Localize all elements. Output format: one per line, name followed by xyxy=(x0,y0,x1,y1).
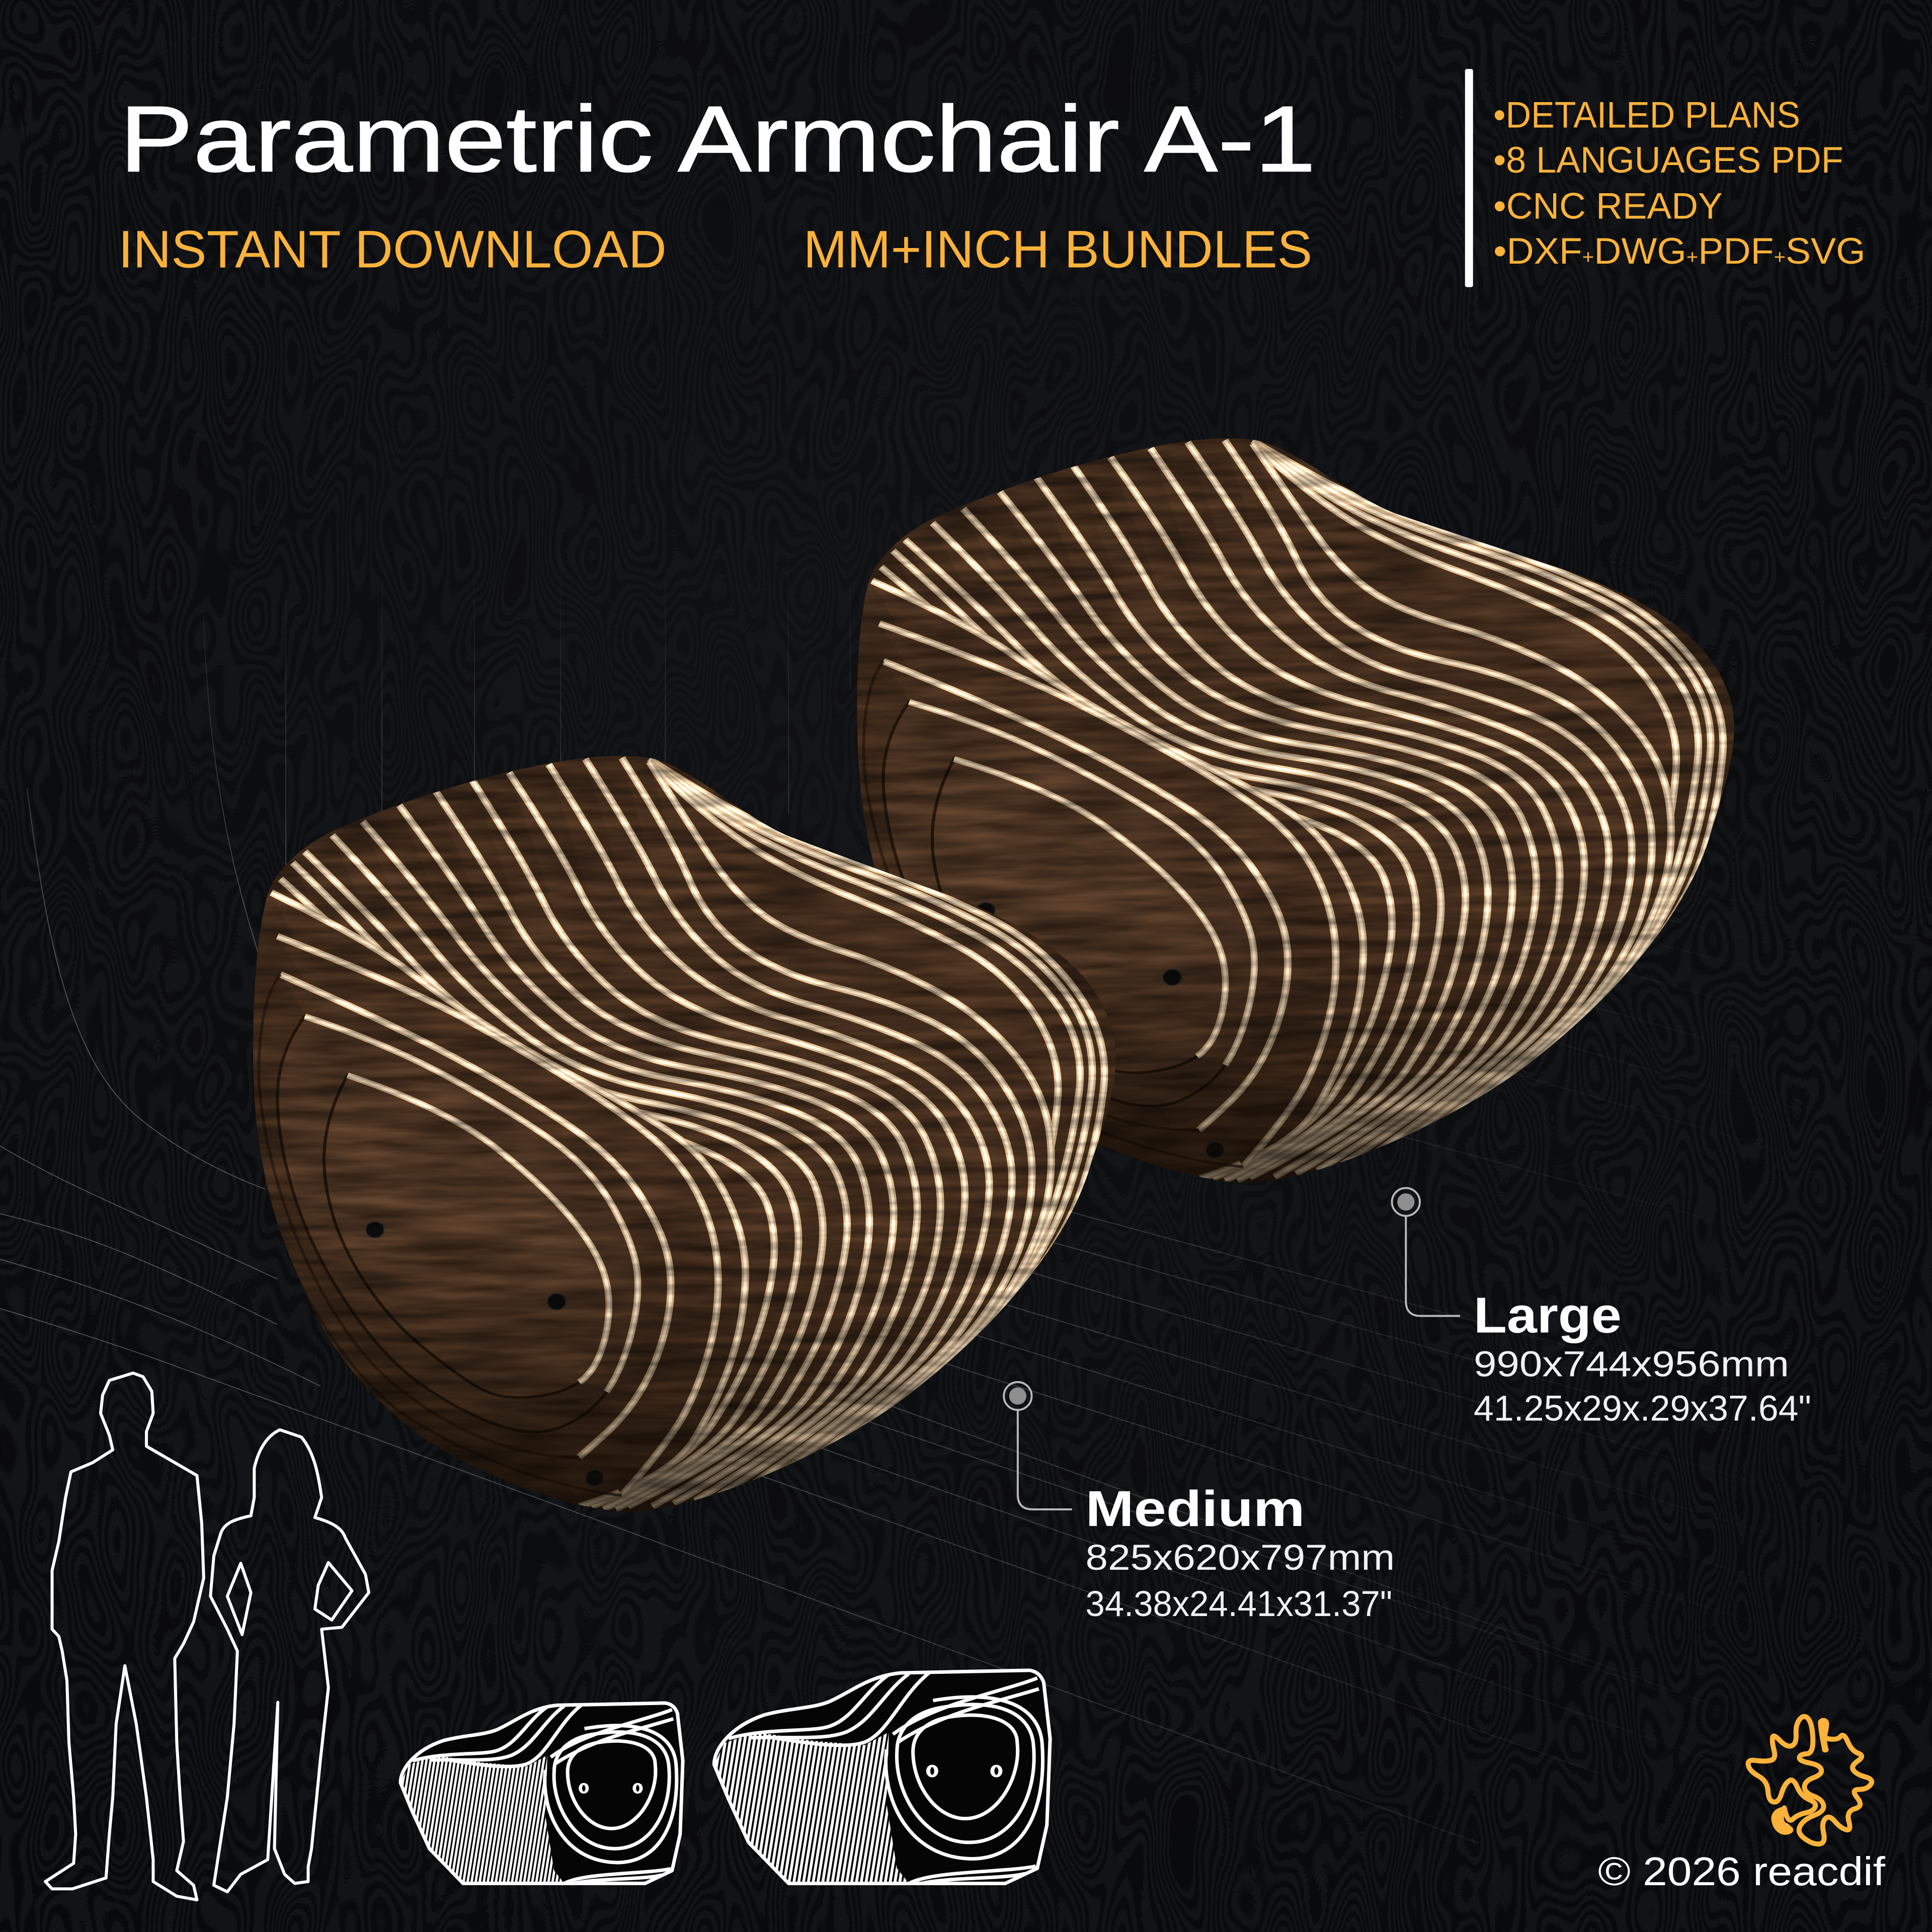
label: medium: 34.38x24.41x31.37" xyxy=(1086,1584,1392,1624)
label: large: Large xyxy=(1474,1287,1622,1344)
silhouette: woman xyxy=(210,1430,369,1892)
subtitle: bundles: MM+INCH BUNDLES xyxy=(803,220,1312,279)
label: large: 41.25x29x.29x37.64" xyxy=(1474,1389,1811,1429)
line-art side views xyxy=(400,1670,1050,1884)
vertical divider xyxy=(1465,69,1473,287)
feature: detailed plans: •DETAILED PLANS xyxy=(1493,94,1800,135)
line art: large chair xyxy=(714,1670,1050,1884)
label: medium xyxy=(1086,1481,1395,1624)
feature: file formats: •DXF+DWG +PDF+SVG xyxy=(1493,230,1866,272)
feature list xyxy=(1493,94,1866,272)
label: large xyxy=(1474,1287,1811,1429)
label: medium: 825x620x797mm xyxy=(1086,1538,1395,1578)
label: large: 990x744x956mm xyxy=(1474,1345,1789,1385)
callout marker: medium xyxy=(1004,1382,1072,1509)
logo xyxy=(1748,1717,1872,1844)
feature: cnc ready: •CNC READY xyxy=(1493,185,1723,227)
feature: languages: •8 LANGUAGES PDF xyxy=(1493,139,1843,181)
large armchair xyxy=(850,428,1745,1191)
copyright: © 2026 reacdif xyxy=(1598,1849,1886,1894)
floor contour lines xyxy=(0,593,1681,1843)
medium armchair xyxy=(253,756,1116,1512)
callout marker: large xyxy=(1392,1188,1460,1316)
subtitle: instant download: INSTANT DOWNLOAD xyxy=(118,220,667,279)
human scale silhouettes xyxy=(45,1373,369,1900)
line art: medium chair xyxy=(400,1703,683,1883)
label: medium: Medium xyxy=(1086,1481,1305,1537)
silhouette: man xyxy=(45,1373,204,1900)
title: Parametric Armchair A-1 xyxy=(120,87,1316,191)
